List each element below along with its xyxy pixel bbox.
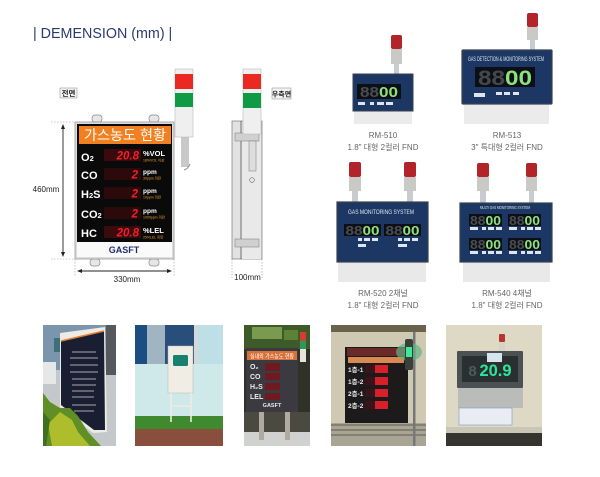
caption (471, 131, 543, 152)
tower (391, 35, 402, 74)
photo 4: indoor gas board: 2층-1 (348, 389, 364, 398)
caption: RM-540 4채널 (482, 288, 532, 298)
board row: CO2: ppm (143, 208, 157, 215)
buttons (470, 227, 541, 254)
board row: O2: 20.8 (116, 150, 140, 162)
board heading: 가스농도 현황 (84, 127, 166, 143)
photo 3: outdoor gas board (244, 325, 310, 446)
dimension: height (33, 122, 75, 259)
panel: front view (33, 69, 193, 284)
caption: RM-513 (493, 131, 522, 140)
caption: RM-510 (369, 131, 398, 140)
bracket (354, 111, 412, 124)
device: RM-540: 8800 (509, 213, 540, 228)
buttons (474, 92, 519, 97)
board white footer (77, 242, 172, 257)
dimension: height: 460mm (33, 185, 60, 194)
board row: H2S: 10ppm 미만 (143, 194, 162, 200)
display (357, 84, 401, 99)
photo 4: indoor gas board: 2층-2 (348, 401, 364, 410)
dimension: depth: 100mm (234, 273, 261, 282)
photo 1: outdoor sign (43, 325, 116, 446)
buttons (358, 102, 393, 105)
caption (472, 288, 543, 310)
photo 3: outdoor gas board: H₂S (250, 384, 263, 391)
device: RM-510: 8800 (360, 84, 398, 101)
heading: GAS MONITORING SYSTEM (348, 209, 414, 216)
board row: CO: ppm (143, 169, 157, 176)
body (462, 50, 552, 104)
caption (348, 288, 419, 310)
panel: side view (232, 69, 291, 282)
device: RM-510 (348, 35, 419, 152)
board row: H2S: 2 (131, 188, 139, 200)
device: RM-540: 8800 (470, 237, 501, 252)
title: | DEMENSION (mm) | (33, 26, 172, 42)
body (460, 203, 552, 262)
heading: GAS DETECTION & MONITORING SYSTEM (468, 57, 544, 63)
heading: MULTI GAS MONITORING SYSTEM (480, 205, 530, 210)
buttons (358, 238, 418, 247)
photo 3: outdoor gas board: 실내외 가스농도 현황 (250, 352, 294, 360)
label: right side: 우측면 (272, 90, 291, 98)
bracket (338, 262, 426, 282)
board row: CO: CO (81, 170, 98, 182)
device: RM-520: 8800 (346, 223, 380, 238)
label: front: 전면 (62, 88, 75, 98)
device: RM-540: 8800 (509, 237, 540, 252)
board row: O2: %VOL (143, 149, 166, 158)
photo 4: indoor gas board: 1층-2 (348, 377, 364, 386)
photo 4: indoor gas board (331, 325, 426, 446)
board logo: GASFT (109, 245, 140, 255)
photo 3: outdoor gas board: GASFT (263, 403, 282, 409)
photo 3: outdoor gas board: LEL (250, 394, 264, 401)
board row: CO2: 1000ppm 미만 (143, 214, 166, 220)
icon: signal tower front (175, 69, 193, 170)
board enclosure (75, 122, 174, 259)
device: RM-513 (462, 13, 552, 152)
dimension: width (75, 259, 174, 284)
device: RM-513: 8800 (478, 67, 532, 90)
tower (527, 13, 538, 50)
mounting ears (90, 115, 159, 266)
photo 5: wall-mounted monitor: 20.9 (480, 361, 512, 380)
towers (349, 162, 416, 202)
board row: HC: 25%LEL 미만 (143, 234, 164, 240)
photo 5: wall-mounted monitor: 8 (468, 363, 477, 380)
board row: O2 (81, 149, 166, 164)
device: RM-540 (460, 163, 552, 310)
photo 4: indoor gas board: 1층-1 (348, 365, 364, 374)
body (353, 74, 413, 111)
board row: HC: HC (81, 228, 97, 240)
caption: 1.8" 대형 2컬러 FND (348, 143, 419, 152)
towers (477, 163, 537, 203)
board row: O2: O2 (81, 152, 94, 164)
icon: signal tower side (243, 69, 261, 134)
device: RM-520 (337, 162, 428, 310)
board row: HC: %LEL (143, 226, 164, 235)
board row: CO2: 2 (131, 208, 139, 220)
board row: H2S: ppm (143, 188, 157, 195)
board row: H2S: H2S (81, 189, 100, 201)
caption: RM-520 2채널 (358, 288, 408, 298)
board row: O2: 18%VOL 이상 (143, 158, 165, 162)
board row: H2S (81, 187, 162, 201)
caption: 1.8" 대형 2컬러 FND (348, 301, 419, 310)
dimension: depth (232, 259, 262, 282)
board row: CO: 30ppm 미만 (143, 176, 162, 180)
board row: HC (81, 226, 164, 240)
side plate (232, 121, 262, 259)
photo 3: outdoor gas board: O₂ (250, 364, 259, 371)
photo 2: cabinet on stand (135, 325, 223, 446)
board row: CO2 (81, 207, 166, 221)
display (475, 67, 535, 87)
caption: 1.8" 대형 2컬러 FND (472, 301, 543, 310)
board row: CO2: CO2 (81, 209, 102, 221)
body (337, 202, 428, 262)
displays (469, 214, 502, 226)
board row: CO (81, 168, 162, 182)
board row: HC: 20.8 (116, 228, 140, 240)
photo 3: outdoor gas board: CO (250, 374, 261, 381)
bracket (463, 262, 550, 282)
dimension: width: 330mm (114, 275, 141, 284)
board black face (77, 124, 172, 242)
board row: CO: 2 (131, 170, 139, 182)
photo 5: wall-mounted monitor (446, 325, 542, 446)
displays (344, 224, 381, 236)
caption: 3" 특대형 2컬러 FND (471, 143, 543, 152)
caption (348, 131, 419, 152)
bracket (464, 104, 549, 124)
label: right side (272, 88, 291, 99)
device: RM-540: 8800 (470, 213, 501, 228)
device: RM-520: 8800 (386, 223, 420, 238)
